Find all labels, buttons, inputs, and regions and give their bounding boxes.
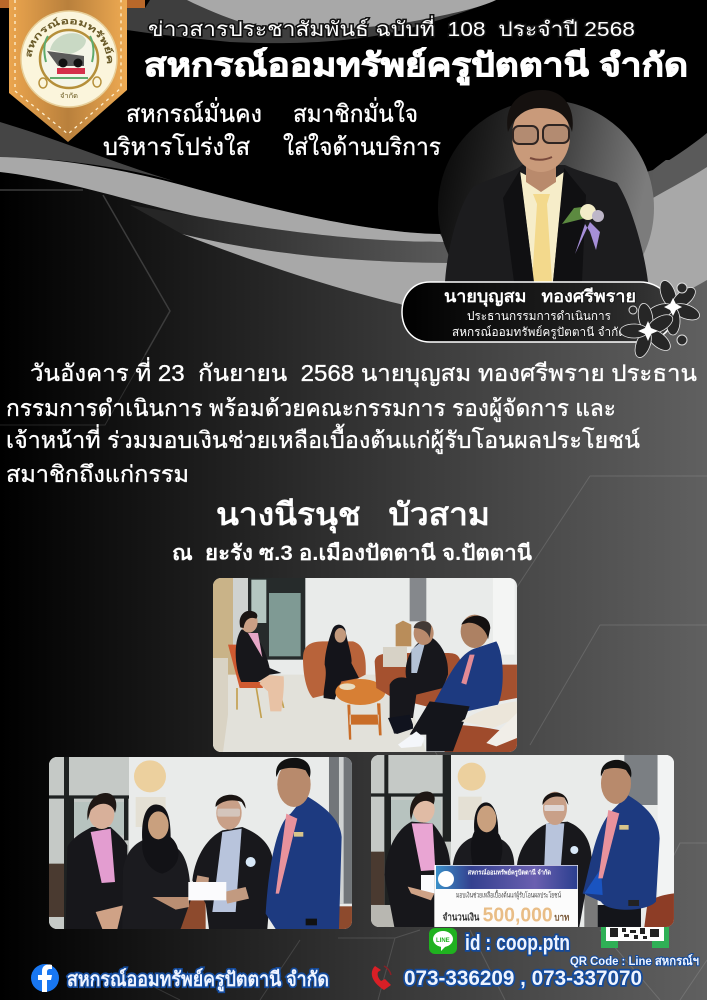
body paragraph: เจ้าหน้าที่ ร่วมมอบเงินช่วยเหลือเบื้องต้นแก่ผู้รับโอนผลประโยชน์ [6, 424, 640, 454]
slogan: ใส่ใจด้านบริการ [283, 133, 441, 161]
coffee table [335, 679, 385, 740]
pillows [461, 701, 517, 746]
mourning flowers [620, 278, 702, 360]
name plate [402, 282, 677, 342]
armchair and woman in hijab [303, 625, 366, 700]
envelope [188, 882, 226, 900]
main title: สหกรณ์ออมทรัพย์ครูปัตตานี จำกัด [144, 47, 688, 86]
body paragraph [6, 357, 697, 487]
facebook page name: สหกรณ์ออมทรัพย์ครูปัตตานี จำกัด [67, 968, 329, 993]
donation board: สหกรณ์ออมทรัพย์ครูปัตตานี จำกัด [468, 868, 551, 877]
header ribbon with seal [0, 0, 145, 142]
donation board: 500,000 [483, 904, 553, 927]
photo: donation cheque presentation [371, 755, 674, 927]
man in black jacket [188, 795, 273, 929]
slogan: สมาชิกมั่นใจ [293, 97, 418, 128]
body paragraph: กรรมการดำเนินการ พร้อมด้วยคณะกรรมการ รองผู้จัดการ และ [6, 395, 616, 422]
woman in pink shirt [384, 791, 450, 927]
body paragraph: สมาชิกถึงแก่กรรม [6, 461, 189, 487]
woman in hijab [453, 802, 514, 867]
man in navy jacket [266, 758, 342, 929]
left chair and woman [228, 611, 284, 718]
deceased member name: นางนีรนุช บัวสาม [216, 497, 490, 534]
icon: LINE: LINE [436, 938, 450, 944]
right sofa [375, 647, 517, 752]
photo: handing over envelope [49, 757, 352, 929]
name plate: สหกรณ์ออมทรัพย์ครูปัตตานี จำกัด [452, 325, 626, 340]
slogan: สหกรณ์มั่นคง [126, 97, 262, 128]
body paragraph: วันอังคาร ที่ 23 กันยายน 2568 นายบุญสม ทองศรีพราย ประธาน [30, 357, 697, 387]
woman in hijab [122, 805, 191, 929]
slogan [103, 97, 441, 161]
corsage [562, 204, 604, 254]
name plate: นายบุญสม ทองศรีพราย [444, 286, 636, 307]
man in navy jacket [583, 760, 660, 927]
icon: LINE [429, 928, 457, 954]
QR caption: QR Code : Line สหกรณ์ฯ [570, 954, 699, 968]
phone numbers: 073-336209 , 073-337070 [404, 967, 642, 990]
icon: phone [372, 966, 391, 990]
donation board: จำนวนเงิน [443, 912, 479, 924]
LINE id: id : coop.ptn [465, 930, 570, 955]
seal logo [20, 10, 118, 108]
man in black jacket [517, 792, 592, 927]
name plate: ประธานกรรมการดำเนินการ [467, 309, 612, 323]
donation board: บาท [554, 913, 569, 923]
portrait of chairman [438, 90, 654, 316]
seated man in blue [398, 615, 503, 751]
donation board: มอบเงินช่วยเหลือเบื้องต้นแก่ผู้รับโอนผลประโยชน์ [456, 890, 561, 900]
woman in pink shirt [66, 793, 127, 929]
location: ณ ยะรัง ซ.3 อ.เมืองปัตตานี จ.ปัตตานี [172, 541, 533, 565]
icon: facebook [31, 964, 59, 992]
seal logo: จำกัด [60, 92, 78, 100]
newsletter issue line: ข่าวสารประชาสัมพันธ์ ฉบับที่ 108 ประจำปี 2568 [148, 15, 635, 41]
seated man in black [388, 621, 448, 734]
photo: home visit meeting [213, 578, 517, 752]
QR code [601, 927, 669, 948]
donation board [434, 865, 578, 927]
slogan: บริหารโปร่งใส [103, 133, 250, 161]
